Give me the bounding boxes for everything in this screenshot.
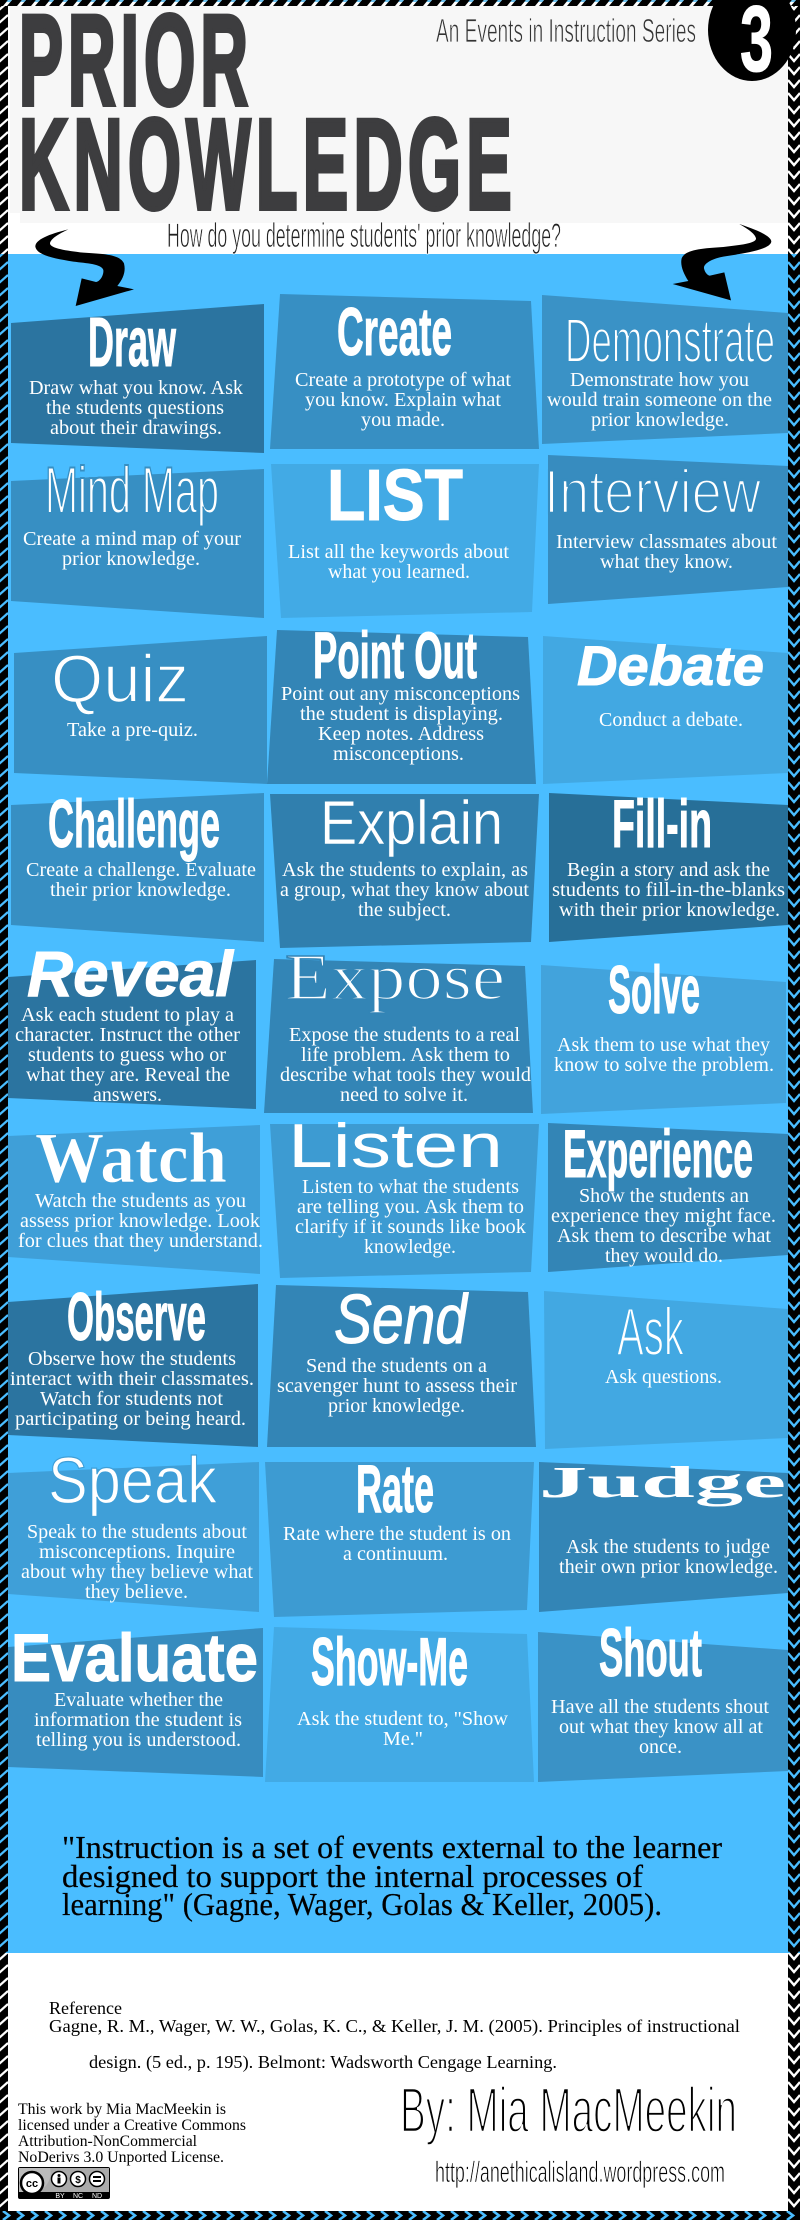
text: Interview: what they know. <box>600 551 733 573</box>
text: Solve <box>554 1034 774 1076</box>
text: Expose: life problem. Ask them to <box>301 1044 510 1066</box>
license text: Attribution-NonCommercial <box>18 2133 198 2150</box>
text: Expose: describe what tools they would <box>280 1064 531 1086</box>
panel: Listen <box>270 1112 539 1278</box>
text: Send: prior knowledge. <box>328 1395 465 1417</box>
text: Watch: Watch the students as you <box>35 1190 246 1212</box>
text: Demonstrate: Demonstrate how you <box>570 369 749 391</box>
panel: Explain <box>270 789 539 948</box>
panel: Shout <box>538 1615 788 1782</box>
text: Watch: for clues that they understand. <box>18 1230 263 1252</box>
text: Listen: clarify if it sounds like book <box>295 1216 527 1238</box>
text: Draw <box>29 377 244 439</box>
icon: CC BY-NC-ND badge: NC <box>73 2193 83 2200</box>
icon: CC BY-NC-ND badge: $ <box>75 2175 81 2186</box>
text: Fill-in: students to fill-in-the-blanks <box>552 879 785 901</box>
heading: Solve: Solve <box>608 952 700 1028</box>
text: Solve: know to solve the problem. <box>554 1054 774 1076</box>
license text <box>18 2101 246 2166</box>
text: Shout: once. <box>639 1736 682 1758</box>
text: Mind Map <box>23 528 241 570</box>
heading: Watch: Watch <box>35 1118 227 1198</box>
panel: Experience <box>548 1116 788 1272</box>
text: Rate: Rate where the student is on <box>283 1523 511 1545</box>
text: Point Out: the student is displaying. <box>300 703 503 725</box>
heading: Create: Create <box>337 294 452 370</box>
quote: learning" (Gagne, Wager, Golas & Keller, 2005). <box>62 1886 662 1922</box>
heading: Send: Send <box>334 1280 469 1358</box>
text: Speak <box>21 1521 253 1603</box>
license text: NoDerivs 3.0 Unported License. <box>18 2149 224 2166</box>
panel: Speak <box>8 1443 259 1612</box>
text: Shout <box>551 1696 769 1758</box>
text: Draw: the students questions <box>46 397 224 419</box>
text: Observe: Observe how the students <box>28 1348 236 1370</box>
text: Create <box>295 369 511 431</box>
heading: Observe: Observe <box>67 1279 206 1355</box>
text: Mind Map: Create a mind map of your <box>23 528 241 550</box>
text: Reveal <box>15 1004 240 1106</box>
text: Reveal: Ask each student to play a <box>21 1004 234 1026</box>
heading: Challenge: Challenge <box>48 786 220 862</box>
text: Explain <box>280 859 529 921</box>
heading: Fill-in: Fill-in <box>612 786 712 862</box>
header panel <box>10 6 788 223</box>
text: Draw: Draw what you know. Ask <box>29 377 244 399</box>
icon: CC BY-NC-ND badge <box>18 2167 110 2200</box>
text: Experience: experience they might face. <box>551 1205 776 1227</box>
heading: Explain: Explain <box>320 789 503 858</box>
text: Challenge <box>26 859 256 901</box>
panel: Demonstrate <box>542 295 788 444</box>
text: Point Out: Keep notes. Address <box>318 723 484 745</box>
text: Explain: a group, what they know about <box>280 879 529 901</box>
text: Evaluate: Evaluate whether the <box>54 1689 223 1711</box>
text: Shout: Have all the students shout <box>551 1696 769 1718</box>
text: List: List all the keywords about <box>288 541 509 563</box>
heading: Debate: Debate <box>577 634 764 697</box>
heading: Shout: Shout <box>599 1615 702 1691</box>
text: Judge <box>559 1536 778 1578</box>
text: Listen: Listen to what the students <box>302 1176 519 1198</box>
title <box>19 0 517 236</box>
text: Judge: Ask the students to judge <box>566 1536 770 1558</box>
panel: Send <box>267 1280 536 1447</box>
panel: Watch <box>8 1118 263 1274</box>
blue content background <box>8 254 788 1953</box>
text: Reveal: students to guess who or <box>28 1044 226 1066</box>
text: Experience: Show the students an <box>579 1185 749 1207</box>
title: KNOWLEDGE <box>19 92 517 236</box>
quote: designed to support the internal processes of <box>62 1858 643 1894</box>
text: Observe: participating or being heard. <box>15 1408 246 1430</box>
text: Rate <box>283 1523 511 1565</box>
text: Expose <box>280 1024 531 1106</box>
text: List <box>288 541 509 583</box>
panel: Ask <box>544 1291 788 1449</box>
text: Point Out: misconceptions. <box>333 743 464 765</box>
heading: Interview: Interview <box>544 458 761 527</box>
icon: CC BY-NC-ND badge: ND <box>92 2193 102 2200</box>
panel: Observe <box>8 1279 258 1447</box>
icon: CC BY-NC-ND badge: cc <box>26 2178 38 2190</box>
text: Reveal: what they are. Reveal the <box>26 1064 230 1086</box>
panel: Rate <box>265 1451 534 1617</box>
panel: Reveal <box>8 938 256 1109</box>
panel: Create <box>270 294 539 449</box>
panel: Challenge <box>11 786 264 942</box>
heading: Evaluate: Evaluate <box>11 1620 258 1696</box>
text: Send <box>277 1355 517 1417</box>
text: Speak: about why they believe what <box>21 1561 253 1583</box>
panel: Judge <box>539 1458 788 1612</box>
text: Draw: about their drawings. <box>50 417 222 439</box>
arrow: right <box>673 224 771 300</box>
text: Show-Me: Me." <box>383 1728 423 1750</box>
text: Shout: out what they know all at <box>559 1716 763 1738</box>
heading: Speak: Speak <box>48 1443 218 1517</box>
panel: List <box>271 456 539 618</box>
badge: number 3 <box>708 0 796 91</box>
text: Watch <box>18 1190 263 1252</box>
text: Fill-in: with their prior knowledge. <box>559 899 780 921</box>
text: Quiz: Take a pre-quiz. <box>67 719 198 741</box>
reference <box>49 1998 740 2073</box>
panel: Draw <box>11 303 264 453</box>
text: Challenge: their prior knowledge. <box>50 879 231 901</box>
text: Speak: they believe. <box>85 1581 188 1603</box>
text: Create: you know. Explain what <box>305 389 501 411</box>
heading: Rate: Rate <box>356 1451 434 1527</box>
text: Mind Map: prior knowledge. <box>62 548 200 570</box>
text: Watch: assess prior knowledge. Look <box>20 1210 261 1232</box>
text: Debate: Conduct a debate. <box>599 709 743 731</box>
arrow: left <box>35 229 134 306</box>
quote: "Instruction is a set of events external to the learner <box>62 1829 722 1865</box>
text: Ask: Ask questions. <box>605 1366 722 1388</box>
text: Demonstrate: prior knowledge. <box>591 409 729 431</box>
heading: Mind Map: Mind Map <box>45 453 219 527</box>
heading: Quiz: Quiz <box>51 641 189 717</box>
text: Reveal: character. Instruct the other <box>15 1024 240 1046</box>
text: Show-Me <box>297 1708 508 1750</box>
license text: This work by Mia MacMeekin is <box>18 2101 226 2118</box>
reference: Reference <box>49 1998 122 2018</box>
text: Listen: are telling you. Ask them to <box>297 1196 524 1218</box>
heading: Reveal: Reveal <box>27 938 234 1010</box>
text: Evaluate <box>34 1689 242 1751</box>
heading: Listen: Listen <box>288 1112 503 1181</box>
panel: Point Out <box>267 618 536 784</box>
panel: Solve <box>541 952 786 1114</box>
text: Explain: Ask the students to explain, as <box>282 859 528 881</box>
text: Evaluate: information the student is <box>34 1709 242 1731</box>
heading: Expose: Expose <box>285 941 505 1014</box>
heading: List: LIST <box>327 456 463 536</box>
text: Observe: interact with their classmates. <box>10 1368 254 1390</box>
text: Point Out: Point out any misconceptions <box>281 683 520 705</box>
heading: Ask: Ask <box>617 1294 685 1370</box>
text: Solve: Ask them to use what they <box>557 1034 771 1056</box>
text: Show-Me: Ask the student to, "Show <box>297 1708 508 1730</box>
text: Rate: a continuum. <box>343 1543 448 1565</box>
text: Listen <box>295 1176 527 1258</box>
text: List: what you learned. <box>328 561 470 583</box>
panel: Show-Me <box>265 1624 534 1782</box>
heading: Show-Me: Show-Me <box>311 1624 468 1700</box>
text: Observe <box>10 1348 254 1430</box>
text: Explain: the subject. <box>358 899 451 921</box>
panel: Interview <box>544 455 788 604</box>
panel: Mind Map <box>11 453 264 618</box>
text: Observe: Watch for students not <box>40 1388 223 1410</box>
text: Experience: they would do. <box>605 1245 723 1267</box>
text: Interview: Interview classmates about <box>556 531 777 553</box>
panel: Fill-in <box>549 786 788 942</box>
panel: Debate <box>543 634 788 784</box>
text: Judge: their own prior knowledge. <box>559 1556 778 1578</box>
heading: Judge: Judge <box>539 1458 786 1507</box>
text: Interview <box>556 531 777 573</box>
reference: Gagne, R. M., Wager, W. W., Golas, K. C., & Keller, J. M. (2005). Principles of instructional <box>49 2016 740 2037</box>
text: Point Out <box>281 683 520 765</box>
panel: Evaluate <box>8 1620 263 1777</box>
text: Reveal: answers. <box>93 1084 162 1106</box>
text: Demonstrate: would train someone on the <box>547 389 772 411</box>
text: Send: Send the students on a <box>306 1355 487 1377</box>
text: Fill-in: Begin a story and ask the <box>567 859 770 881</box>
text: Speak: misconceptions. Inquire <box>39 1541 235 1563</box>
text: Listen: knowledge. <box>364 1236 456 1258</box>
text: Demonstrate <box>547 369 772 431</box>
quote <box>62 1829 722 1922</box>
text: Challenge: Create a challenge. Evaluate <box>26 859 256 881</box>
heading: Point Out: Point Out <box>313 618 477 692</box>
text: Create: Create a prototype of what <box>295 369 511 391</box>
text: Create: you made. <box>361 409 445 431</box>
text: Speak: Speak to the students about <box>27 1521 247 1543</box>
panel: Expose <box>264 941 533 1113</box>
text: Evaluate: telling you is understood. <box>36 1729 241 1751</box>
text: Experience <box>551 1185 776 1267</box>
license text: licensed under a Creative Commons <box>18 2117 246 2134</box>
text: Send: scavenger hunt to assess their <box>277 1375 517 1397</box>
text: Expose: need to solve it. <box>340 1084 468 1106</box>
text: Fill-in <box>552 859 785 921</box>
text: Experience: Ask them to describe what <box>557 1225 771 1247</box>
panel: Quiz <box>14 636 267 784</box>
reference: design. (5 ed., p. 195). Belmont: Wadsworth Cengage Learning. <box>89 2052 557 2073</box>
icon: CC BY-NC-ND badge: BY <box>55 2193 65 2200</box>
text: Expose: Expose the students to a real <box>289 1024 520 1046</box>
heading: Draw: Draw <box>88 303 176 381</box>
